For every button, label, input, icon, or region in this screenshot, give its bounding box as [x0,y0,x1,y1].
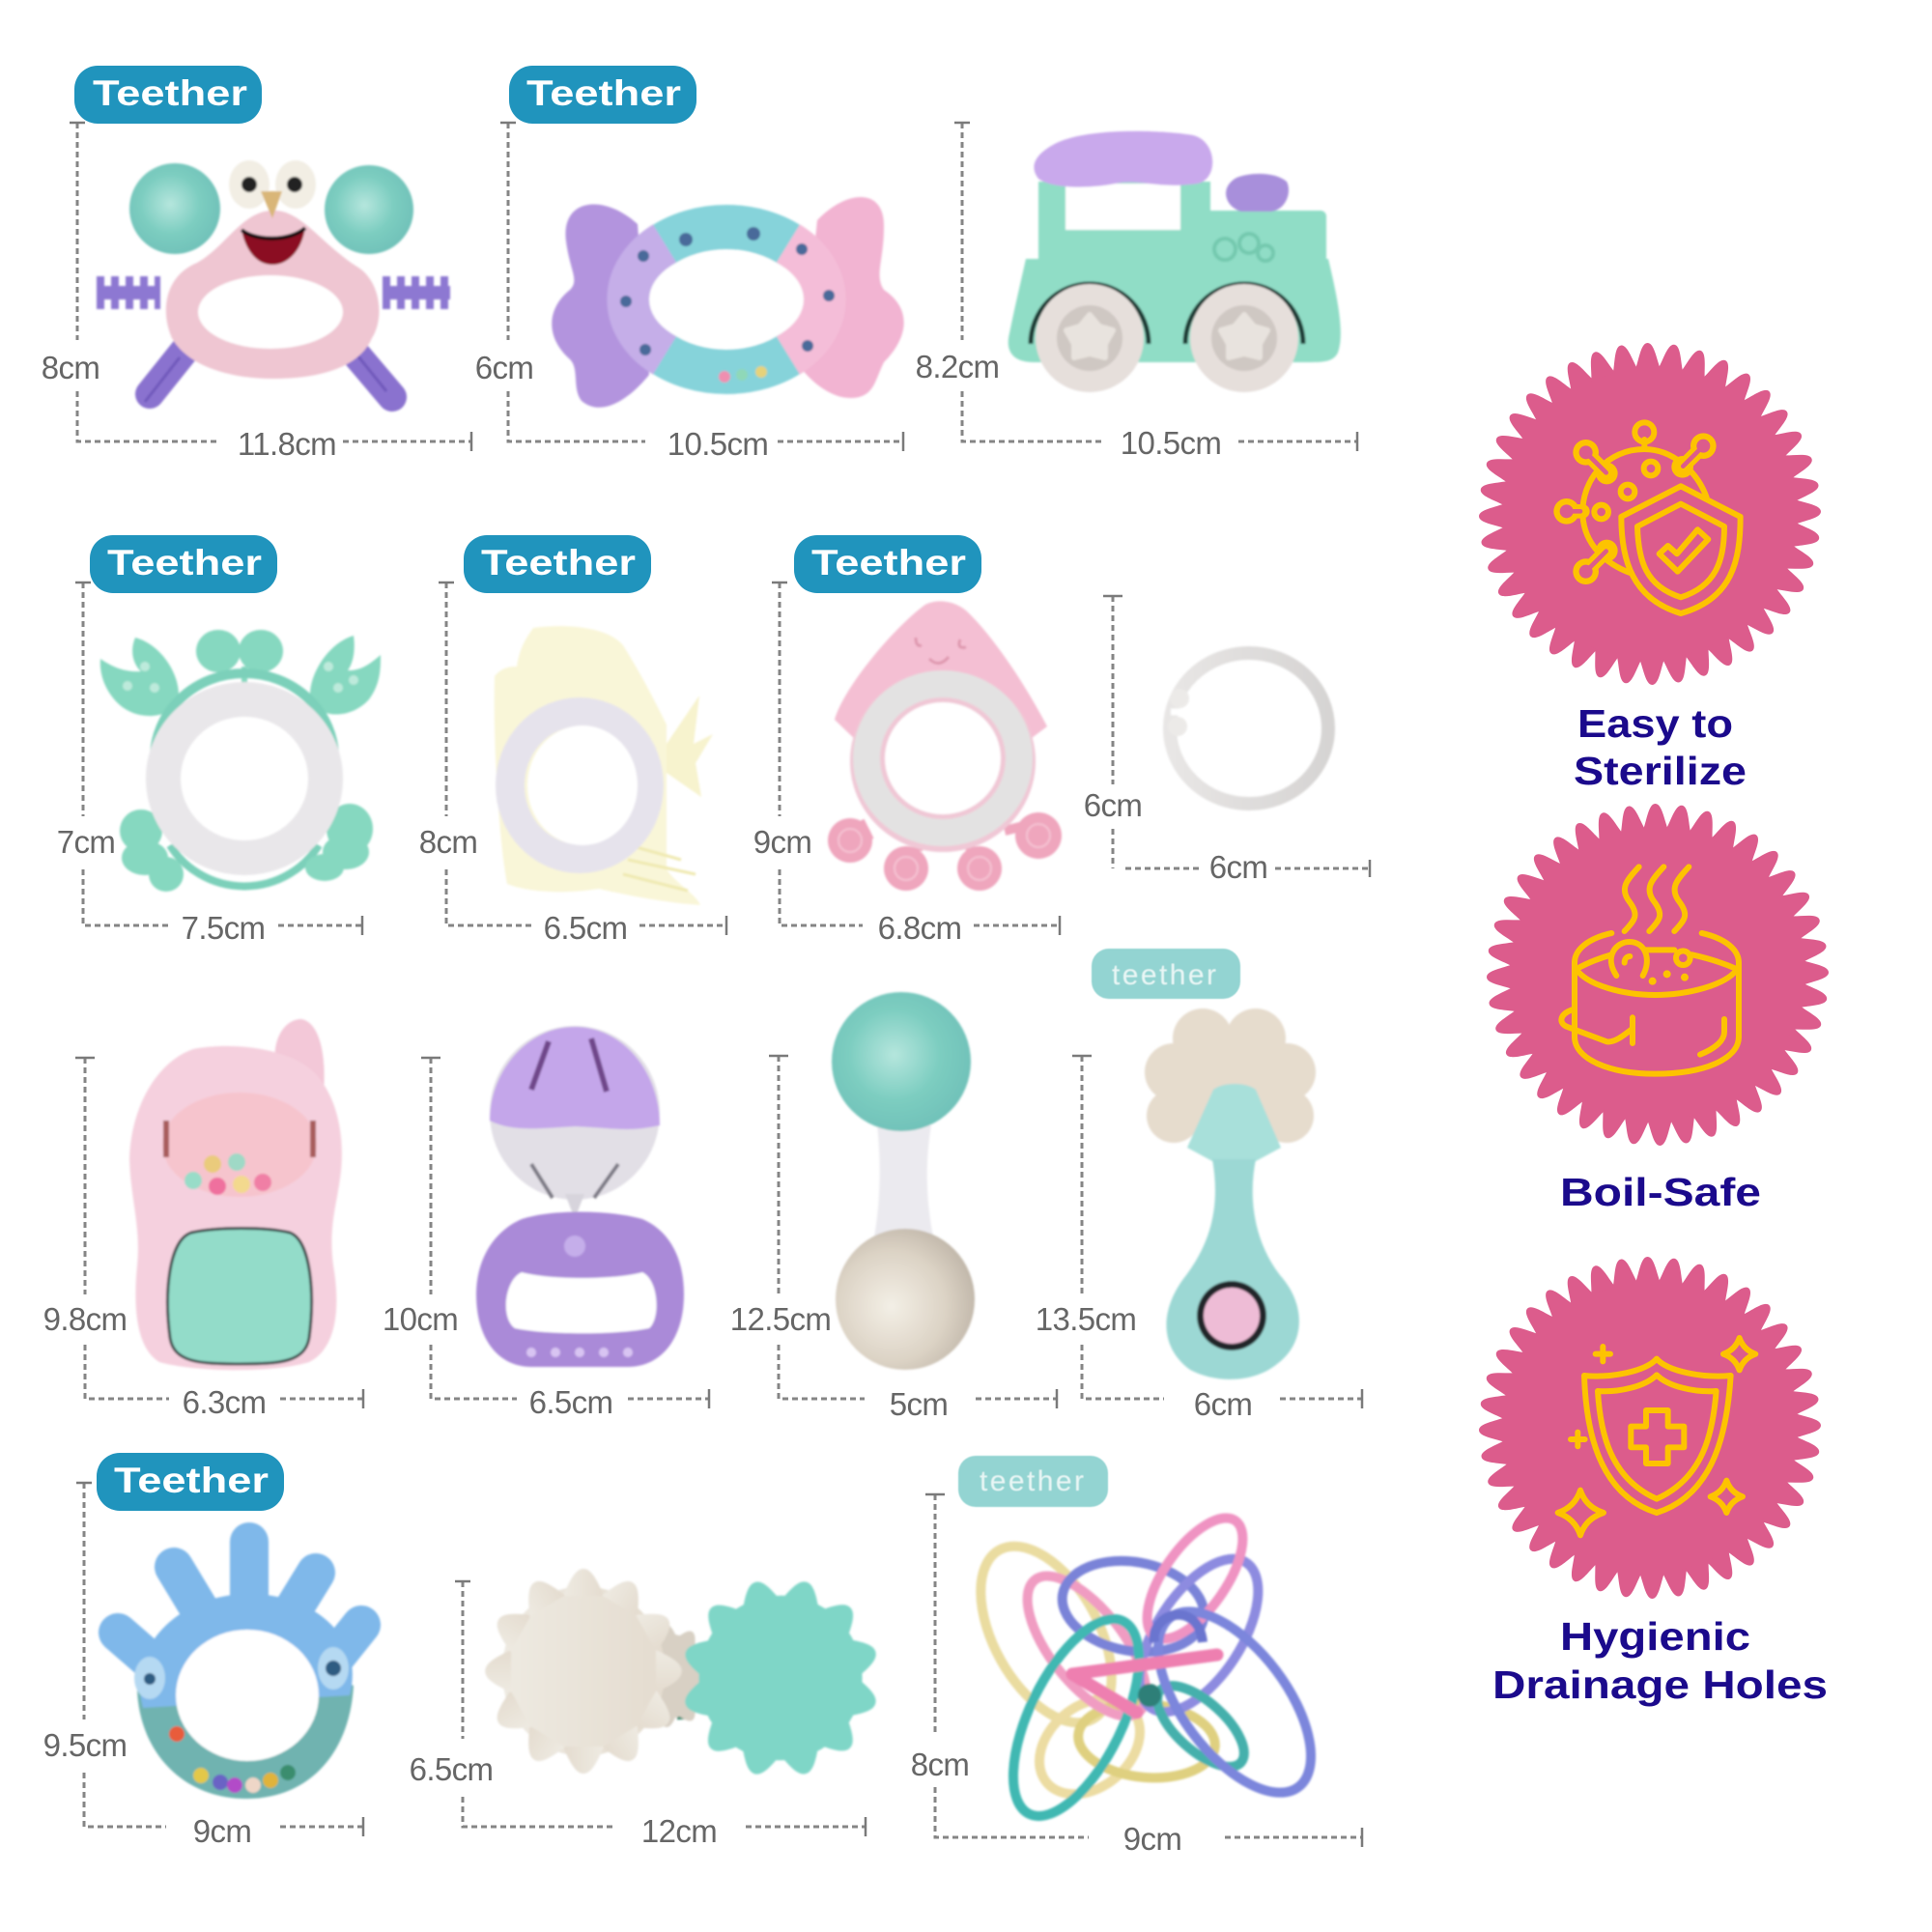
label: 12cm: 12cm [641,1813,717,1849]
panel: phone rattle, 9.8cm by 6.3cm [43,1019,363,1420]
label: 7cm: 7cm [57,824,115,860]
label: Boil-Safe: Boil-Safe [1560,1170,1761,1214]
tag: Teether 5: Teether [811,543,966,582]
label: 6cm: 6cm [1194,1386,1252,1422]
label: 9cm: 9cm [1123,1821,1181,1857]
label: 10.5cm: 10.5cm [668,426,768,462]
toy: paw rattle [1145,1009,1316,1379]
label: 6cm: 6cm [475,350,533,385]
toy: dumbbell rattle [832,992,975,1370]
label: 10cm: 10cm [383,1301,458,1337]
panel: pink squid teether, 9cm by 6.8cm [753,582,1062,946]
label: 6.3cm: 6.3cm [183,1384,266,1420]
tag: pale teether above knot ball [958,1456,1108,1507]
label: Hygienic Drainage Holes [1492,1614,1828,1707]
badge: Hygienic Drainage Holes [1477,1255,1828,1707]
panel: purple ball rattle, 10cm by 6.5cm [383,1026,709,1420]
panel: candy ring rattle, 6cm by 10.5cm [475,123,904,462]
label: 5cm: 5cm [890,1386,948,1422]
icon: shield with cross and sparkles [1558,1338,1755,1535]
toy: pale yellow fish teether [495,626,713,905]
toy: blue hand teether [118,1542,361,1799]
tag: Teether 6: Teether [114,1461,269,1500]
panel: dumbbell rattle, 12.5cm by 5cm [730,992,1057,1422]
label: 6cm width: 6cm [1209,849,1267,885]
label: 9cm: 9cm [193,1813,251,1849]
label: 6.5cm: 6.5cm [544,910,627,946]
label: Hygienic Drainage Holes: Drainage Holes [1492,1662,1828,1707]
toy: pink squid teether [828,601,1062,891]
badge: Easy to Sterilize [1477,341,1823,793]
toy: white ring [1168,653,1328,804]
label: 6.5cm: 6.5cm [529,1384,612,1420]
label: 8cm: 8cm [42,350,99,385]
label: Easy to Sterilize: Sterilize [1574,749,1747,793]
tag: Teether 1 [74,66,262,124]
label: 10.5cm: 10.5cm [1121,425,1221,461]
starburst 1 [1477,341,1823,687]
starburst 3 [1477,1255,1823,1601]
label: 9.8cm: 9.8cm [43,1301,127,1337]
icon: virus and shield [1553,422,1741,613]
tag: Teether 3: Teether [107,543,262,582]
panel: white ring, 6cm by 6cm [1084,596,1370,885]
label: 7.5cm: 7.5cm [182,910,265,946]
tag: Teether 5 [794,535,981,593]
label: 13.5cm: 13.5cm [1036,1301,1136,1337]
tag: Teether 2 [509,66,696,124]
toy: candy ring rattle [552,197,904,408]
tag: Teether 6 [97,1453,284,1511]
toy: mint crab teether [100,630,381,892]
label: 8.2cm: 8.2cm [916,349,999,384]
label: 6cm height: 6cm [1084,787,1142,823]
label: 12.5cm: 12.5cm [730,1301,831,1337]
tag: Teether 2: Teether [526,73,681,113]
label: 8cm: 8cm [911,1747,969,1782]
label: 9cm: 9cm [753,824,811,860]
toy: purple ball rattle [476,1026,684,1367]
tag: Teether 1: Teether [93,73,247,113]
panel: paw rattle, 13.5cm by 6cm [1036,1009,1362,1422]
label: 11.8cm: 11.8cm [238,426,336,462]
toy: train rattle [1009,131,1341,392]
toy: phone rattle [129,1019,342,1370]
toy: looped knot ball [953,1503,1340,1834]
label: 9.5cm: 9.5cm [43,1727,127,1763]
label: 6.5cm: 6.5cm [410,1751,493,1787]
tag: Teether 4 [464,535,651,593]
panel: blue hand teether, 9.5cm by 9cm [43,1483,363,1849]
tag: pale teether above paw rattle [1092,949,1240,999]
starburst 2 [1485,802,1831,1148]
panel: pink crab rattle, 8cm by 11.8cm [42,123,471,462]
tag: Teether 4: Teether [481,543,636,582]
tag: Teether 3 [90,535,277,593]
badge: Boil-Safe [1485,802,1831,1214]
panel: looped knot ball, 8cm by 9cm [911,1494,1362,1857]
label: Easy to Sterilize: Easy to [1577,701,1733,746]
label: Easy to Sterilize [1574,701,1747,793]
label: 8cm: 8cm [419,824,477,860]
toy: gear pair teether [485,1556,901,1800]
toy: pink crab rattle [97,160,450,402]
panel: train rattle, 8.2cm by 10.5cm [916,123,1357,461]
label: 6.8cm: 6.8cm [878,910,961,946]
tag: pale teether above knot ball: teether [980,1465,1084,1497]
icon: boiling pot [1561,867,1739,1074]
panel: pale yellow fish teether, 8cm by 6.5cm [419,582,726,946]
tag: pale teether above paw rattle: teether [1112,959,1216,991]
panel: mint crab teether, 7cm by 7.5cm [57,582,381,946]
panel: gear pair teether, 6.5cm by 12cm [410,1556,901,1849]
label: Hygienic Drainage Holes: Hygienic [1560,1614,1750,1659]
